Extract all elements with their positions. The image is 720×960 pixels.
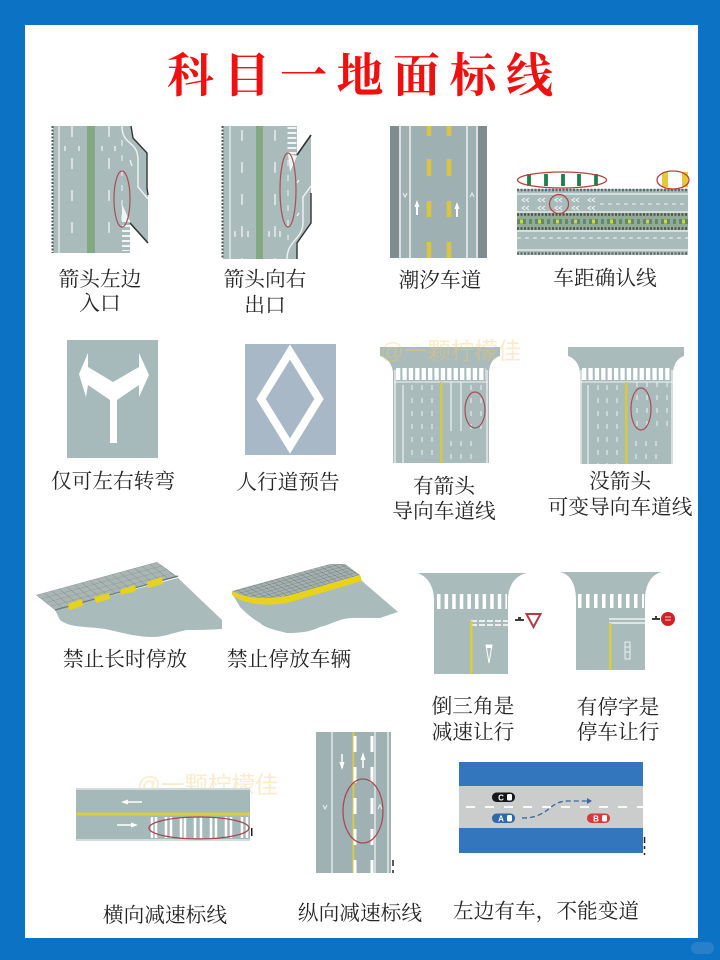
panel: no long-term parking (36, 562, 222, 671)
road diagram: entrance (52, 126, 148, 253)
arrow: lane change path (522, 798, 592, 818)
sign: split arrow (67, 340, 158, 458)
highlight ellipse (343, 779, 383, 843)
car C (492, 792, 515, 802)
caption line 2: 可变导向车道线 (548, 496, 693, 519)
curb diagram: solid yellow (232, 564, 398, 633)
car B: B (593, 814, 599, 824)
caption line 2: 停车让行 (577, 721, 660, 744)
panel: distance confirmation line (517, 171, 689, 290)
caption: 没箭头 (589, 470, 651, 493)
caption: 禁止长时停放 (63, 648, 187, 671)
icon: yield sign (515, 614, 540, 627)
caption: 纵向减速标线 (298, 902, 422, 925)
road diagram: transverse (76, 788, 250, 841)
caption: 箭头左边 (59, 268, 141, 291)
stray mark (392, 860, 394, 873)
car A: A (498, 814, 504, 824)
car A (492, 814, 515, 824)
caption: 有停字是 (577, 696, 659, 719)
highlight ellipse: yellow posts (657, 171, 689, 189)
caption: 横向减速标线 (103, 904, 227, 927)
caption line 2: 减速让行 (432, 721, 515, 744)
panel: no parking (227, 564, 398, 671)
caption: 有箭头 (413, 475, 475, 498)
panel: arrow left entrance (52, 126, 148, 315)
road diagram: variable lane (568, 347, 684, 464)
highlight ellipse (114, 171, 130, 227)
panel: stop sign (560, 572, 675, 744)
panel: arrow right exit (222, 126, 311, 317)
panel: lane guidance with arrows (380, 347, 500, 523)
road diagram: yield (417, 573, 527, 674)
caption line 2: 出口 (244, 294, 286, 317)
car B (587, 814, 610, 824)
highlight circle: chevrons (550, 194, 568, 214)
road diagram: longitudinal (316, 732, 391, 873)
road diagram: exit (222, 126, 311, 259)
road diagram: distance confirmation (517, 172, 688, 255)
panel: longitudinal deceleration markings (298, 732, 422, 925)
watermark: @一颗柠檬佳 (380, 338, 521, 364)
car C: C (498, 794, 504, 802)
stray mark (644, 837, 646, 855)
panel: inverted triangle yield (417, 573, 540, 744)
panel: no lane change when car on left (453, 762, 643, 923)
panel: left-right turn sign (51, 340, 175, 493)
stray mark (251, 828, 252, 836)
panel: tidal lane (390, 126, 487, 292)
caption: 人行道预告 (236, 471, 340, 494)
caption: 仅可左右转弯 (51, 470, 175, 493)
road diagram: stop (560, 572, 662, 670)
panel: crosswalk ahead (236, 344, 340, 494)
panel: transverse deceleration markings (76, 788, 250, 927)
caption: 禁止停放车辆 (227, 648, 351, 671)
road diagram: with arrows (380, 347, 500, 463)
caption: 车距确认线 (553, 267, 657, 290)
icon: stop sign (652, 612, 675, 626)
small logo badge (691, 942, 714, 954)
caption line 2: 入口 (79, 292, 121, 315)
caption: 倒三角是 (432, 695, 514, 718)
caption: 箭头向右 (224, 268, 306, 291)
watermark: @一颗柠檬佳 (137, 772, 278, 798)
highlight ellipse (465, 392, 485, 428)
sign: diamond (245, 344, 336, 455)
caption: 潮汐车道 (399, 269, 481, 292)
road diagram: tidal lane (390, 126, 487, 258)
highlight ellipse (149, 817, 249, 839)
panel: variable lane line (548, 347, 693, 519)
road scene (459, 762, 643, 853)
caption line 2: 导向车道线 (392, 500, 496, 523)
highlight ellipse (631, 388, 651, 430)
title: 科目一地面标线 (167, 51, 562, 103)
caption: 左边有车，不能变道 (453, 900, 639, 923)
highlight ellipse: posts (518, 172, 606, 188)
curb diagram: dashed yellow (36, 562, 222, 637)
highlight ellipse (280, 153, 296, 227)
